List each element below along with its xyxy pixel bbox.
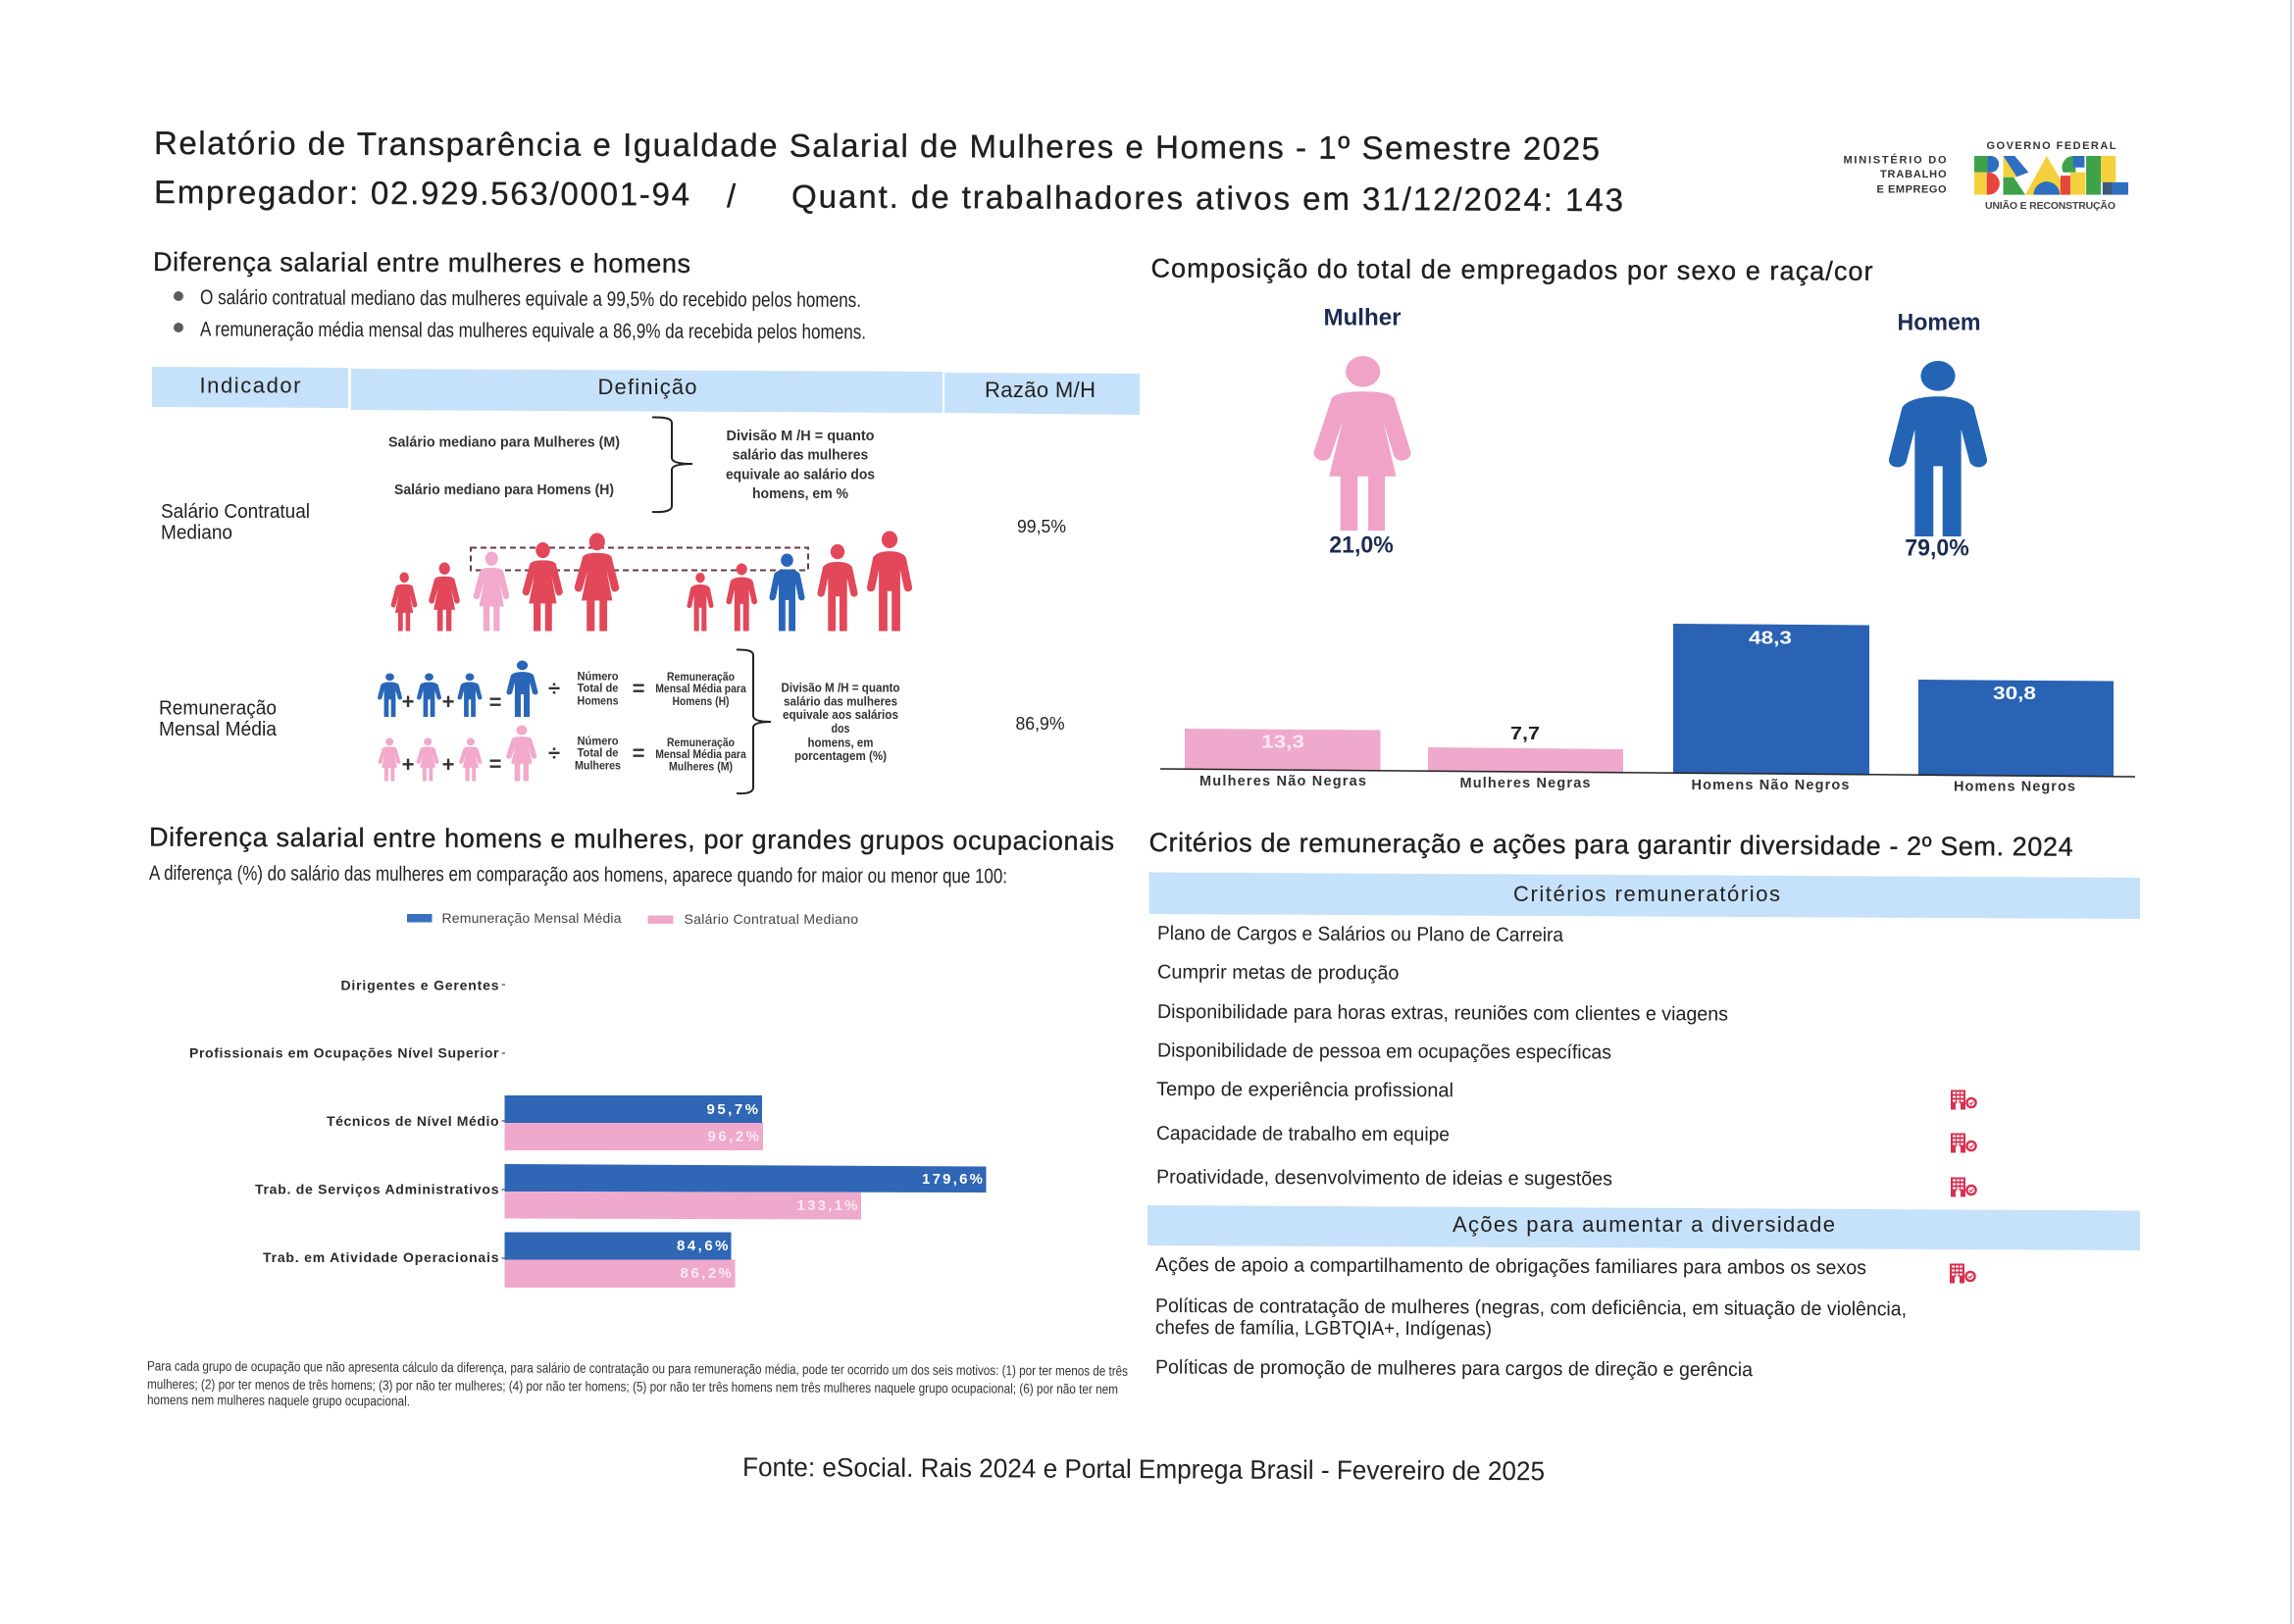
icon: company marker proatividade — [1951, 1177, 1976, 1196]
definition: division mean: salário das mulheres — [784, 694, 897, 708]
equation women: Mensal Média para — [655, 747, 746, 761]
actions list — [1155, 1254, 1907, 1381]
equation women: Mulheres (M) — [669, 759, 733, 773]
horizontal bar chart: 96,2% — [708, 1128, 759, 1145]
horizontal bar chart: 133,1% — [796, 1197, 857, 1214]
actions list: Políticas de promoção de mulheres para cargos de direção e gerência — [1155, 1357, 1754, 1381]
definition: division mean: homens, em — [808, 736, 873, 749]
icon: man — [1889, 361, 1987, 536]
ministry label — [1844, 153, 1947, 196]
bullet 1: O salário contratual mediano das mulheres equivale a 99,5% do recebido pelos homens. — [200, 286, 861, 312]
panel: workforce composition — [1150, 254, 2135, 794]
table header — [152, 367, 1140, 415]
value 21,0: 21,0% — [1329, 532, 1394, 559]
definition: division median: homens, em % — [752, 486, 848, 502]
horizontal bar chart: Profissionais em Ocupações Nível Superior — [189, 1045, 499, 1061]
brasil wordmark — [1974, 156, 2128, 195]
band: criterios remuneratorios — [1149, 873, 2140, 919]
table header: Definição — [598, 375, 696, 399]
definition: division median: equivale ao salário dos — [726, 467, 875, 482]
bar chart: race and sex: 30,8 — [1993, 684, 2036, 703]
ministry label: TRABALHO — [1880, 169, 1947, 180]
row label: salario contratual mediano: Mediano — [161, 522, 232, 543]
panel: occupational groups — [147, 823, 1128, 1408]
heading: Critérios de remuneração e ações para garantir diversidade - 2º Sem. 2024 — [1148, 828, 2073, 862]
subheading: A diferença (%) do salário das mulheres em comparação aos homens, aparece quando for maior ou menor que 100: — [149, 862, 1007, 888]
horizontal bar chart — [189, 977, 987, 1288]
uniao label: UNIÃO E RECONSTRUÇÃO — [1985, 199, 2116, 212]
definition: division median — [726, 429, 875, 502]
horizontal bar chart: Técnicos de Nível Médio — [327, 1113, 498, 1129]
median figures — [391, 532, 912, 632]
row label: remuneracao mensal media: Mensal Média — [159, 719, 278, 740]
definition: division mean — [781, 681, 900, 763]
bar chart: race and sex: Mulheres Negras — [1459, 776, 1591, 791]
equation women: Total de — [577, 745, 619, 759]
equation men: + — [442, 689, 454, 714]
equation men: Total de — [577, 681, 619, 694]
ministry label: MINISTÉRIO DO — [1844, 153, 1947, 166]
title line 1: Relatório de Transparência e Igualdade Salarial de Mulheres e Homens - 1º Semestre 2025 — [154, 125, 1600, 167]
slash separator: / — [727, 178, 737, 214]
footnote — [147, 1358, 1128, 1408]
heading: Diferença salarial entre mulheres e homens — [153, 247, 690, 279]
equation men: Homens — [577, 694, 619, 708]
bar chart: race and sex: 13,3 — [1261, 732, 1304, 751]
row label: salario contratual mediano — [161, 501, 310, 543]
actions list: Ações de apoio a compartilhamento de obrigações familiares para ambos os sexos — [1155, 1254, 1866, 1279]
bar chart: race and sex: 48,3 — [1749, 628, 1792, 647]
label mulher: Mulher — [1324, 304, 1401, 331]
equation men: + — [402, 689, 414, 714]
row label: salario contratual mediano: Salário Contratual — [161, 501, 310, 523]
equation men: ÷ — [548, 677, 560, 700]
definition: median salaries: Salário mediano para Homens (H) — [394, 482, 614, 498]
scan edge line — [2290, 0, 2292, 1624]
equation men: Número — [577, 669, 618, 683]
criteria list: Capacidade de trabalho em equipe — [1156, 1123, 1450, 1145]
footnote: mulheres; (2) por ter menos de três homens; (3) por não ter mulheres; (4) por não ter homens; (5) por não ter três homens nem três mulheres naquele grupo ocupacional; (6) por não ter nem — [147, 1376, 1118, 1396]
definition: median salaries — [388, 435, 620, 498]
equation women: Número — [577, 734, 618, 747]
equation women: + — [402, 752, 414, 777]
source line: Fonte: eSocial. Rais 2024 e Portal Emprega Brasil - Fevereiro de 2025 — [742, 1452, 1545, 1486]
employer id: Empregador: 02.929.563/0001-94 — [154, 174, 689, 212]
equation women — [379, 726, 746, 781]
median line-up dashed box — [471, 547, 808, 571]
criteria list: Disponibilidade de pessoa em ocupações específicas — [1157, 1040, 1611, 1064]
criteria list: Plano de Cargos e Salários ou Plano de Carreira — [1157, 923, 1564, 946]
worker count: Quant. de trabalhadores ativos em 31/12/2024: 143 — [791, 178, 1623, 218]
equation women: + — [442, 752, 454, 777]
equation men: = — [633, 677, 644, 700]
criteria list — [1156, 923, 1728, 1191]
value 99,5: 99,5% — [1017, 517, 1066, 536]
horizontal bar chart: 84,6% — [677, 1238, 728, 1254]
footnote: homens nem mulheres naquele grupo ocupacional. — [147, 1392, 410, 1408]
icon: company marker acoes — [1950, 1263, 1975, 1283]
heading: Diferença salarial entre homens e mulheres, por grandes grupos ocupacionais — [149, 823, 1114, 856]
actions list: Políticas de contratação de mulheres (negras, com deficiência, em situação de violência, — [1155, 1295, 1907, 1320]
definition: division mean: porcentagem (%) — [794, 748, 887, 763]
band: criterios remuneratorios: Critérios remuneratórios — [1513, 882, 1780, 906]
bar chart: race and sex — [1160, 624, 2135, 794]
bar chart: race and sex: 7,7 — [1510, 724, 1540, 743]
ministry label: E EMPREGO — [1877, 184, 1947, 196]
criteria list: Disponibilidade para horas extras, reuniões com clientes e viagens — [1157, 1001, 1728, 1026]
row label: remuneracao mensal media: Remuneração — [159, 698, 277, 720]
table header: Razão M/H — [985, 378, 1096, 402]
bar chart: race and sex: Homens Negros — [1954, 779, 2075, 794]
icon: company marker equipe — [1951, 1134, 1976, 1153]
row label: remuneracao mensal media — [159, 698, 278, 740]
table header: Indicador — [200, 373, 300, 398]
definition: division mean: Divisão M /H = quanto — [781, 681, 900, 694]
definition: division median: salário das mulheres — [733, 447, 868, 463]
header title block — [154, 125, 1623, 218]
value 79,0: 79,0% — [1905, 535, 1969, 561]
icon: company marker tempo — [1951, 1091, 1976, 1110]
band: acoes diversidade — [1147, 1205, 2140, 1250]
equation men: Mensal Média para — [655, 682, 746, 695]
equation women: ÷ — [548, 741, 560, 765]
bar chart: race and sex: Homens Não Negros — [1691, 778, 1850, 793]
governo federal label: GOVERNO FEDERAL — [1987, 140, 2116, 152]
horizontal bar chart: 95,7% — [706, 1101, 758, 1118]
definition: median salaries: Salário mediano para Mulheres (M) — [388, 435, 620, 451]
government logo — [1844, 140, 2128, 212]
definition: division median: Divisão M /H = quanto — [726, 429, 875, 444]
panel: criteria and diversity actions — [1147, 828, 2140, 1381]
equation women: = — [633, 741, 644, 765]
heading: Composição do total de empregados por sexo e raça/cor — [1150, 254, 1873, 286]
equation men: = — [489, 690, 501, 714]
actions list: chefes de família, LGBTQIA+, Indígenas) — [1155, 1317, 1492, 1340]
brace 1 — [652, 417, 692, 512]
band: acoes diversidade: Ações para aumentar a diversidade — [1453, 1212, 1835, 1237]
equation women: Mulheres — [575, 759, 621, 773]
horizontal bar chart: Dirigentes e Gerentes — [341, 977, 499, 992]
definition: division mean: dos — [832, 721, 849, 736]
horizontal bar chart: 179,6% — [922, 1171, 983, 1188]
equation women: Remuneração — [667, 736, 735, 749]
equation men — [378, 661, 746, 717]
criteria list: Cumprir metas de produção — [1157, 962, 1400, 985]
criteria list: Tempo de experiência profissional — [1156, 1079, 1453, 1101]
horizontal bar chart: 86,2% — [681, 1265, 732, 1282]
label homem: Homem — [1897, 310, 1981, 335]
equation men: Homens (H) — [673, 694, 730, 708]
criteria list: Proatividade, desenvolvimento de ideias e sugestões — [1156, 1167, 1612, 1191]
definition: division mean: equivale aos salários — [783, 707, 898, 722]
equation men: Remuneração — [667, 670, 735, 684]
legend: Salário Contratual Mediano — [685, 911, 858, 927]
value 86,9: 86,9% — [1016, 714, 1065, 734]
horizontal bar chart: Trab. em Atividade Operacionais — [263, 1249, 499, 1265]
brace 2 — [737, 649, 771, 793]
icon: woman — [1313, 356, 1411, 531]
panel: salary difference — [152, 247, 1140, 793]
legend: Remuneração Mensal Média — [441, 910, 622, 926]
footnote: Para cada grupo de ocupação que não apresenta cálculo da diferença, para salário de contratação ou para remuneração média, pode ter ocorrido um dos seis motivos: (1) por ter menos de três — [147, 1358, 1128, 1379]
equation women: = — [489, 751, 501, 777]
legend — [407, 910, 858, 927]
bar chart: race and sex: Mulheres Não Negras — [1199, 774, 1366, 789]
bullet 2: A remuneração média mensal das mulheres equivale a 86,9% da recebida pelos homens. — [200, 319, 866, 343]
horizontal bar chart: Trab. de Serviços Administrativos — [255, 1181, 499, 1196]
